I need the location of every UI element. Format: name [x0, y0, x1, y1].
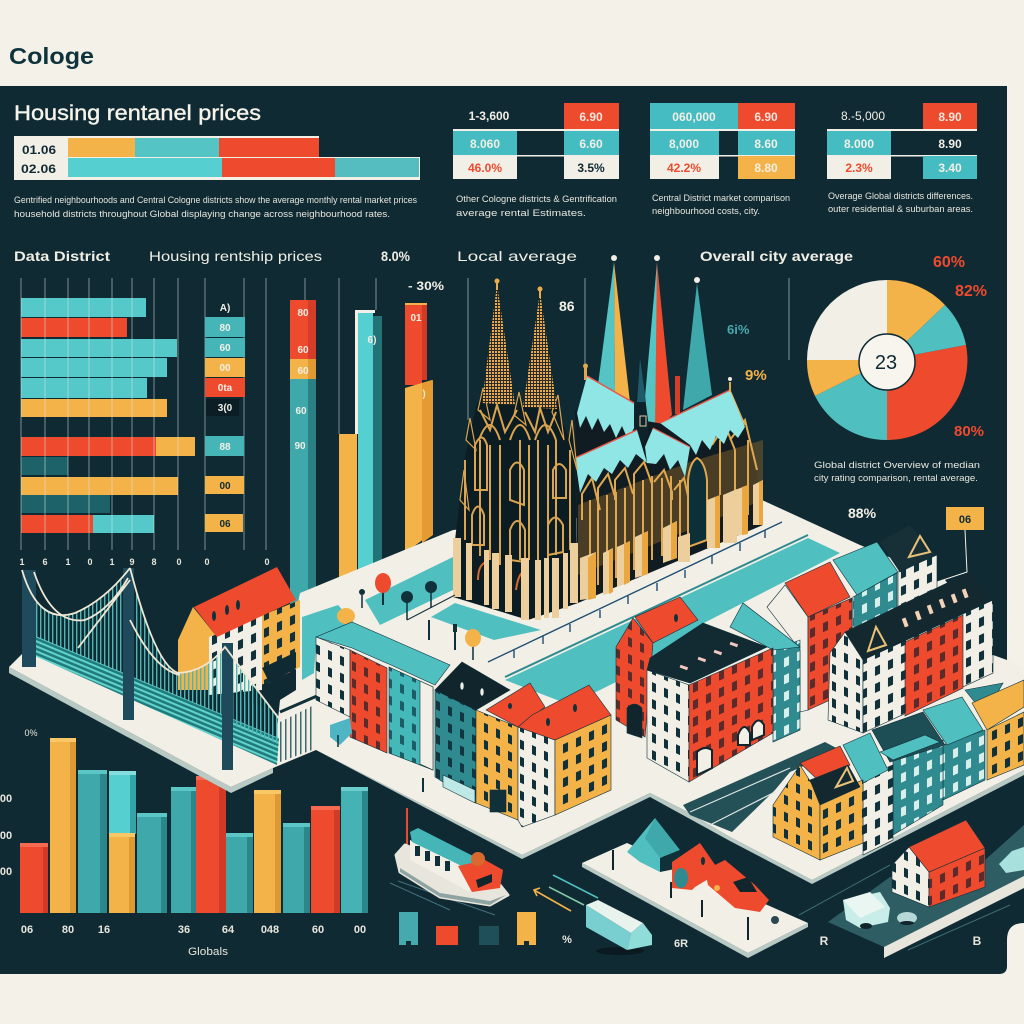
chart axis numbers	[19, 557, 270, 567]
yellow house	[476, 710, 518, 820]
chart axis numbers: 1	[109, 557, 115, 567]
direction arrows	[534, 875, 598, 911]
summary table 2	[650, 103, 795, 179]
summary table 1: 3.5%	[577, 161, 605, 175]
vertical bars: rental prices: 60	[297, 345, 309, 356]
legend swatches	[399, 912, 982, 950]
suspension bridge	[22, 568, 340, 770]
stacked price bars	[14, 136, 420, 180]
yellow corner house	[555, 715, 611, 815]
summary table 2: 8.80	[754, 161, 778, 175]
vertical bars: rental prices: 80	[297, 308, 309, 319]
chart axis numbers: 0	[176, 557, 182, 567]
chart axis numbers: 1	[19, 557, 25, 567]
summary table 3: 8.000	[844, 137, 874, 151]
lamp posts	[613, 850, 779, 940]
intro description text: household districts throughout Global displaying change across neighbourhood rates.	[14, 209, 390, 220]
pie description text	[814, 460, 980, 484]
white and red gable house	[767, 585, 808, 712]
nave body	[575, 410, 763, 603]
transept arched door	[688, 458, 707, 547]
intro description text: Gentrified neighbourhoods and Central Cologne districts show the average monthly rental market prices	[14, 195, 417, 206]
trees and lamps on plaza	[337, 573, 481, 660]
arched red doors	[478, 562, 523, 590]
pie description text: city rating comparison, rental average.	[814, 473, 978, 484]
summary table 3: 8.90	[938, 137, 962, 151]
lower right row of houses	[773, 680, 1024, 860]
right yellow house	[987, 712, 1024, 780]
end gate	[233, 695, 280, 745]
title: Cologe	[9, 43, 94, 69]
red house lower right	[892, 820, 985, 907]
table description texts	[456, 191, 973, 219]
summary table 1: 8.060	[470, 137, 500, 151]
value tags column	[205, 303, 245, 532]
teal mid house	[773, 640, 800, 742]
buttresses	[580, 480, 763, 600]
vertical bars: rental prices: 60	[297, 366, 309, 377]
bottom chart axis labels: 06	[21, 924, 33, 936]
dark cut-out behind right houses	[807, 500, 1007, 660]
chart axis numbers: 6	[42, 557, 48, 567]
bar chart: bottom	[20, 738, 368, 913]
chart axis numbers: 9	[129, 557, 135, 567]
red house on small street	[672, 843, 720, 890]
riverside houses	[616, 525, 993, 782]
heading: housing rental prices: Housing rentanel prices	[14, 102, 261, 125]
summary table 3: 2.3%	[845, 161, 873, 175]
bottom chart axis labels: 00	[0, 866, 12, 878]
gothic tracery	[465, 405, 570, 565]
teal roof	[316, 622, 450, 685]
chart axis numbers: 1	[65, 557, 71, 567]
bottom chart axis labels: 0%	[24, 728, 38, 738]
west front	[453, 403, 578, 620]
summary table 1	[453, 103, 619, 179]
big right house	[828, 632, 863, 733]
plaza water	[302, 557, 541, 680]
value tags column: 00	[219, 363, 231, 374]
roof: left front	[575, 430, 647, 493]
ferry	[396, 808, 508, 905]
callout tag	[937, 507, 984, 582]
vertical bars: rental prices	[290, 279, 444, 614]
pie chart	[807, 280, 967, 440]
vertical guide lines	[468, 278, 789, 420]
teal tall house	[943, 730, 985, 800]
fence line	[488, 522, 782, 662]
chart axis numbers: 8	[151, 557, 157, 567]
big black roof building	[647, 670, 689, 782]
white corner house	[518, 727, 555, 827]
pie percent labels: 9%	[745, 367, 767, 384]
value tags column: 0ta	[218, 383, 233, 394]
table description texts: outer residential & suburban areas.	[828, 204, 973, 215]
table description texts: neighbourhood costs, city.	[652, 206, 760, 217]
vertical bars: rental prices: 6)	[368, 335, 376, 346]
summary table 2: 8.60	[754, 137, 778, 151]
pie percent labels: 60%	[933, 254, 965, 271]
white house	[316, 637, 350, 717]
section labels	[14, 248, 853, 264]
value tags column: 80	[219, 323, 231, 334]
yellow gabled house	[773, 765, 820, 860]
summary table 2: 060,000	[672, 110, 716, 124]
table description texts: Other Cologne districts & Gentrification	[456, 194, 617, 205]
table description texts: Overage Global districts differences.	[828, 191, 973, 202]
bottom chart axis labels: 16	[98, 924, 110, 936]
bottom chart axis labels: 00	[0, 830, 12, 842]
roof: right front	[645, 428, 690, 477]
west front columns	[453, 538, 578, 620]
vertical bars: rental prices: - 30%	[408, 279, 444, 293]
value tags column: 00	[219, 481, 231, 492]
percent label above houses: 88%	[848, 505, 877, 521]
red roof one	[486, 683, 545, 727]
bottom chart axis labels: 00	[0, 793, 12, 805]
value tags column: 88	[219, 442, 231, 453]
stacked price bars: 01.06	[22, 143, 56, 157]
golden spires	[482, 278, 557, 409]
red car	[705, 860, 769, 912]
summary table 3	[827, 103, 977, 179]
pie chart: 23	[875, 352, 897, 374]
bottom chart axis labels: 64	[222, 924, 235, 936]
summary table 1: 1-3,600	[469, 109, 510, 123]
deck	[26, 632, 279, 765]
bottom chart axis labels: 60	[312, 924, 324, 936]
intro description text	[14, 195, 417, 220]
bottom chart axis labels: 00	[354, 924, 366, 936]
main cables	[22, 568, 280, 720]
callout tag: 06	[959, 514, 971, 526]
chart axis numbers: 0	[264, 557, 270, 567]
crossing tower	[634, 358, 648, 445]
cathedral	[453, 278, 763, 620]
nave golden band	[578, 440, 763, 575]
small car	[897, 912, 917, 925]
table description texts: average rental Estimates.	[456, 208, 586, 219]
bottom chart axis labels: Globals	[188, 946, 229, 958]
hanger cables	[22, 568, 280, 750]
bottom chart axis labels: 80	[62, 924, 74, 936]
dark teal house	[893, 740, 943, 835]
summary table 1: 6.90	[579, 110, 603, 124]
truck	[586, 900, 652, 955]
vertical bars: rental prices: )	[422, 389, 426, 400]
summary table 3: 8.-5,000	[841, 109, 885, 123]
table description texts: Central District market comparison	[652, 193, 790, 204]
legend swatches: 6R	[674, 938, 688, 950]
pinnacles	[460, 388, 577, 510]
dark teal house	[435, 690, 476, 803]
nave arcades	[582, 420, 757, 590]
pie percent labels: 86	[559, 298, 575, 314]
towers	[22, 570, 36, 667]
white narrow house	[863, 765, 893, 855]
summary table 1: 46.0%	[468, 161, 502, 175]
legend swatches: R	[820, 934, 829, 948]
lower right road	[799, 825, 1024, 958]
water ripple lines	[390, 881, 495, 915]
value tags column: 3(0	[218, 403, 233, 414]
teal back house	[853, 573, 897, 650]
bottom chart axis labels	[0, 728, 366, 958]
pie percent labels: 80%	[954, 423, 984, 440]
coloured spires behind cathedral	[598, 255, 712, 432]
section labels: Housing rentship prices	[149, 248, 322, 264]
red roof two	[518, 685, 611, 740]
legend swatches: B	[973, 934, 982, 948]
roof finials	[583, 364, 732, 392]
van	[843, 892, 890, 929]
street row of houses	[316, 622, 611, 827]
road	[683, 742, 840, 832]
lower platform: small street	[582, 843, 808, 958]
red gable house	[616, 618, 653, 737]
bottom chart axis labels: 36	[178, 924, 190, 936]
summary table 2: 6.90	[754, 110, 778, 124]
arched doorway	[627, 704, 642, 738]
isometric ground: main platform	[273, 500, 1024, 884]
isometric ground: bridge platform	[9, 650, 277, 793]
vertical bars: rental prices: 01	[410, 313, 422, 324]
legend swatches: %	[562, 934, 572, 946]
section labels: Local average	[457, 248, 577, 264]
summary table 2: 42.2%	[667, 161, 701, 175]
roof: left back	[577, 376, 634, 440]
vertical bars: rental prices: 90	[294, 441, 306, 452]
stacked price bars: 02.06	[21, 162, 56, 176]
teal house on small street	[627, 818, 680, 872]
pie percent labels: 6i%	[727, 322, 750, 337]
summary table 1: 6.60	[579, 137, 603, 151]
chart axis numbers: 0	[87, 557, 93, 567]
vertical bars: rental prices: 60	[295, 406, 307, 417]
dark roof tall white house	[898, 555, 937, 618]
pie description text: Global district Overview of median	[814, 460, 980, 471]
summary table 3: 3.40	[938, 161, 962, 175]
section labels: Data District	[14, 248, 110, 264]
value tags column: 06	[219, 519, 231, 530]
section labels: Overall city average	[700, 248, 853, 264]
value tags column: A)	[220, 303, 230, 314]
value tags column: 60	[219, 343, 231, 354]
roof: right back	[660, 390, 745, 455]
teal house	[389, 667, 433, 770]
summary table 2: 8,000	[669, 137, 699, 151]
horizontal bar chart	[21, 278, 376, 550]
summary table 3: 8.90	[938, 110, 962, 124]
yellow house by bridge	[178, 567, 300, 695]
chart axis numbers: 0	[204, 557, 210, 567]
bottom chart axis labels: 048	[261, 924, 279, 936]
red house	[350, 650, 387, 753]
car at right edge	[999, 847, 1024, 873]
pie percent labels: 82%	[955, 283, 987, 300]
awning and post	[330, 718, 423, 792]
section labels: 8.0%	[381, 248, 410, 264]
pie percent labels	[559, 254, 987, 440]
canal	[505, 538, 840, 705]
black roof	[435, 662, 510, 710]
